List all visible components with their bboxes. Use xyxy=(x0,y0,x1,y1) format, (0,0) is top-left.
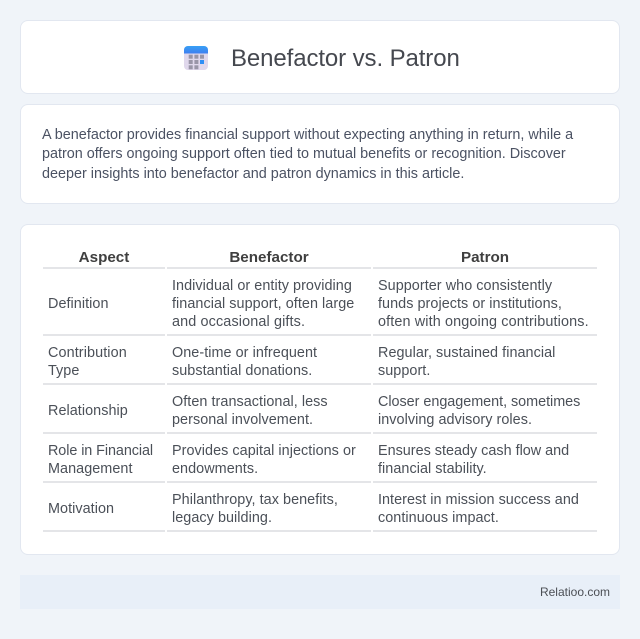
row: Definition: and occasional gifts. xyxy=(172,314,305,330)
footer bar xyxy=(20,575,620,609)
row: Role in Financial Management: Role in Financial xyxy=(48,443,153,459)
text block: intro: A benefactor provides financial support without expecting anything in return, while a xyxy=(42,127,573,143)
row: Role in Financial Management: Management xyxy=(48,461,132,477)
panel: comparison table card xyxy=(20,224,620,555)
row: Definition: financial support, often large xyxy=(172,296,354,312)
panel: intro card xyxy=(20,104,620,204)
row: Motivation xyxy=(48,492,579,526)
row: Contribution Type: Type xyxy=(48,363,79,379)
row: Role in Financial Management: financial stability. xyxy=(378,461,487,477)
row: Role in Financial Management xyxy=(48,443,569,477)
footer text: Relatioo.com xyxy=(540,585,610,599)
row: Role in Financial Management: Ensures steady cash flow and xyxy=(378,443,569,459)
row: Contribution Type: Regular, sustained financial xyxy=(378,345,555,361)
row: Role in Financial Management: endowments. xyxy=(172,461,258,477)
row: Motivation: legacy building. xyxy=(172,510,272,526)
row: Definition: Individual or entity providing xyxy=(172,278,352,294)
row: Contribution Type: Contribution xyxy=(48,345,127,361)
row: Role in Financial Management: Provides capital injections or xyxy=(172,443,356,459)
row: Relationship: Relationship xyxy=(48,403,128,419)
title: Benefactor vs. Patron xyxy=(231,45,460,72)
row: Relationship: Often transactional, less xyxy=(172,394,328,410)
row: Definition xyxy=(48,278,589,330)
row: Contribution Type: substantial donations. xyxy=(172,363,312,379)
row: Relationship: Closer engagement, sometimes xyxy=(378,394,580,410)
table header: Benefactor: Benefactor xyxy=(229,249,309,266)
text block: intro xyxy=(42,127,574,182)
row: Contribution Type xyxy=(48,345,555,379)
text block: intro: patron offers ongoing support often tied to mutual benefits or recognition. Discover xyxy=(42,146,566,162)
row: Definition: often with ongoing contributions. xyxy=(378,314,589,330)
row: Motivation: continuous impact. xyxy=(378,510,499,526)
row: Motivation: Motivation xyxy=(48,501,114,517)
table header: Patron: Patron xyxy=(461,249,509,266)
row: Motivation: Interest in mission success and xyxy=(378,492,579,508)
icon: calendar xyxy=(184,46,208,70)
row: Motivation: Philanthropy, tax benefits, xyxy=(172,492,338,508)
text block: intro: deeper insights into benefactor and patron dynamics in this article. xyxy=(42,166,464,182)
row: Contribution Type: One-time or infrequent xyxy=(172,345,317,361)
row: Definition: funds projects or institutions, xyxy=(378,296,562,312)
row: Contribution Type: support. xyxy=(378,363,430,379)
row: Definition: Definition xyxy=(48,296,108,312)
row: Definition: Supporter who consistently xyxy=(378,278,552,294)
row: Relationship: personal involvement. xyxy=(172,412,313,428)
row: Relationship xyxy=(48,394,580,428)
panel: header card xyxy=(20,20,620,94)
table header: Aspect: Aspect xyxy=(79,249,129,266)
row: Relationship: involving advisory roles. xyxy=(378,412,532,428)
